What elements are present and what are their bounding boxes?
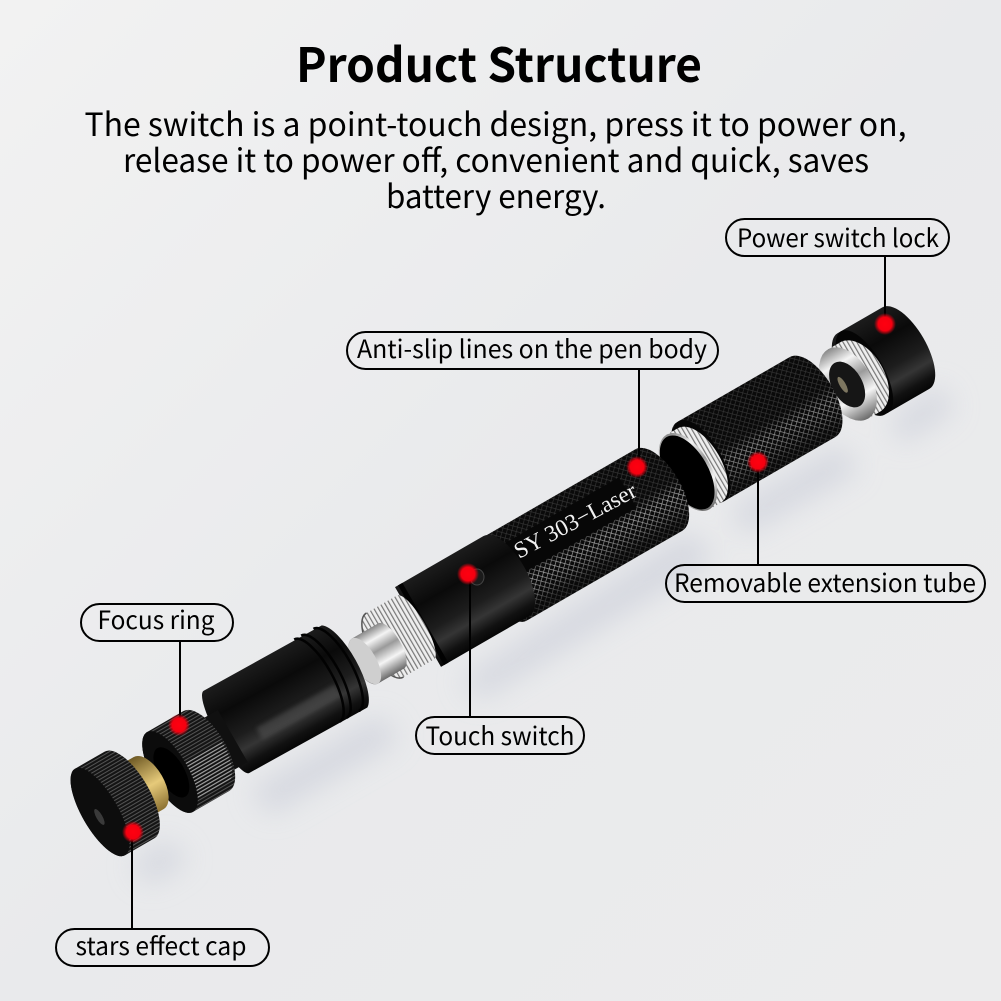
- stars effect cap: [59, 742, 177, 864]
- callout: touch switch: Touch switch: [426, 717, 574, 753]
- extension tube: [658, 356, 842, 511]
- title: Product Structure: [296, 27, 702, 96]
- description text: release it to power off, convenient and quick, saves: [123, 136, 869, 182]
- engraved model text: SY 303−Laser: [510, 478, 641, 563]
- callout: touch switch: [416, 563, 584, 754]
- callout: stars effect cap: stars effect cap: [76, 927, 246, 963]
- button: [470, 569, 484, 585]
- description text: [84, 100, 906, 218]
- touch switch section: [395, 526, 547, 667]
- description text: The switch is a point-touch design, press it to power on,: [84, 100, 906, 146]
- callout: anti-slip lines: [347, 330, 718, 478]
- laser pointer product: [59, 297, 947, 864]
- power switch lock part: [807, 297, 947, 431]
- callout: stars effect cap: [56, 821, 269, 966]
- callout: anti-slip lines: Anti-slip lines on the pen body: [357, 330, 707, 366]
- callout: focus ring: [81, 601, 233, 736]
- product shadows: [130, 385, 955, 885]
- callout: power switch lock: Power switch lock: [737, 219, 939, 255]
- focus body: [190, 618, 378, 778]
- neck: [190, 710, 248, 778]
- focus ring: [131, 701, 247, 821]
- chrome connector: [342, 590, 442, 690]
- callout: removable extension tube: [666, 451, 985, 602]
- callout: removable extension tube: Removable extension tube: [674, 564, 976, 600]
- callout: focus ring: Focus ring: [98, 601, 214, 637]
- callout: power switch lock: [726, 219, 949, 335]
- description text: battery energy.: [386, 172, 606, 218]
- knurled pen body: [486, 448, 690, 622]
